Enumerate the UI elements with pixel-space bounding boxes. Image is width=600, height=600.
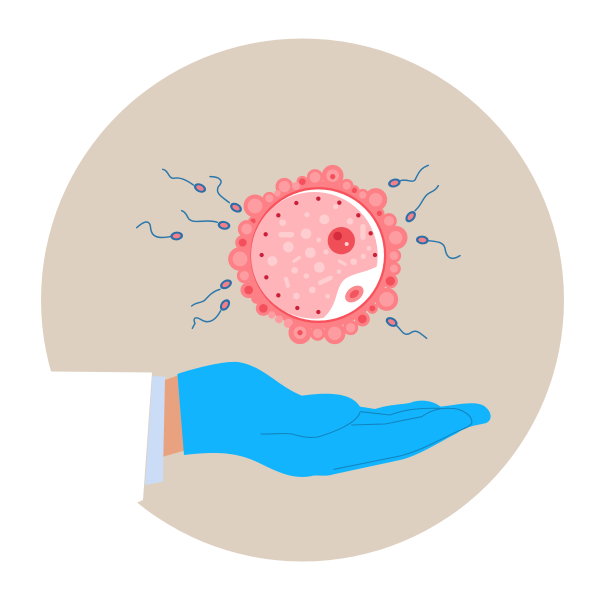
outer follicle cells	[229, 166, 407, 343]
egg cell	[229, 166, 407, 343]
sperm 8	[403, 186, 438, 224]
white sleeve	[0, 371, 152, 520]
background circle	[41, 38, 564, 562]
sperm 7	[387, 165, 428, 189]
blue glove	[177, 362, 491, 477]
red membrane ring	[250, 187, 386, 323]
sperm cells left group	[137, 169, 244, 328]
sperm 2	[210, 177, 244, 215]
sperm 4	[137, 222, 183, 241]
sperm 5	[192, 277, 234, 306]
glove finger lines	[261, 408, 472, 469]
shirt cuff	[145, 376, 165, 485]
hand with glove	[145, 362, 491, 485]
sperm cells right group	[384, 165, 460, 338]
pink cytoplasm	[251, 192, 378, 319]
sperm 6	[192, 297, 232, 328]
polar body	[342, 282, 367, 306]
sperm 9	[416, 235, 460, 258]
dark red granules	[259, 196, 377, 314]
cytoplasm spots	[267, 204, 371, 299]
sperm 1	[163, 169, 208, 195]
sperm 3	[182, 211, 231, 231]
bare wrist	[163, 376, 184, 457]
sperm 10	[384, 315, 427, 338]
white zona ring	[253, 189, 384, 321]
nucleus	[328, 227, 355, 254]
